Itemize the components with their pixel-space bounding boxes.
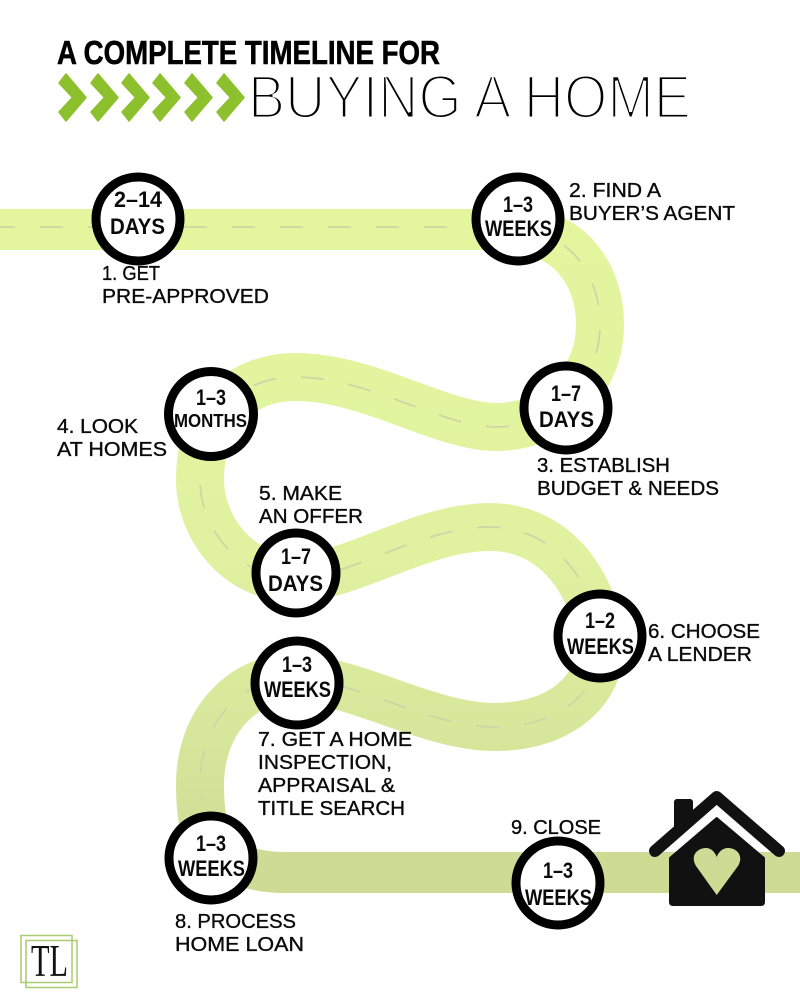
step 9 badge: WEEKS <box>525 885 592 910</box>
step 2 badge: WEEKS <box>485 216 552 241</box>
logo: TL monogram <box>21 936 77 988</box>
step 6 badge <box>558 594 642 678</box>
step 4 label: AT HOMES <box>57 439 167 461</box>
step 4 badge: 1–3 <box>196 385 226 410</box>
title: buying a home: BUYING A HOME <box>248 63 691 131</box>
title: a complete timeline for: A COMPLETE TIMELINE FOR <box>57 34 440 71</box>
step 5 badge <box>256 533 336 613</box>
winding road <box>0 227 800 872</box>
step 7 badge <box>255 641 339 725</box>
step 9 badge <box>516 841 600 925</box>
step 1 badge: 2–14 <box>114 187 163 212</box>
step 7 label: TITLE SEARCH <box>258 798 405 820</box>
step 3 badge: 1–7 <box>551 381 581 406</box>
step 6 label: A LENDER <box>648 644 752 666</box>
icon: house with heart <box>655 797 779 905</box>
step 9 badge: 1–3 <box>543 858 573 883</box>
step 4 badge <box>168 372 254 456</box>
step 5 badge: DAYS <box>268 571 323 596</box>
step 7 badge: 1–3 <box>282 652 312 677</box>
step 1 badge <box>96 177 180 261</box>
step 5 label: 5. MAKE <box>259 483 342 505</box>
step 7 badge: WEEKS <box>264 677 331 702</box>
step 4 label: 4. LOOK <box>57 416 139 438</box>
step 8 label: 8. PROCESS <box>175 911 296 933</box>
step 1 label: 1. GET <box>102 263 160 285</box>
step 6 badge: 1–2 <box>585 608 615 633</box>
step 3 badge: DAYS <box>539 407 594 432</box>
step 2 badge <box>476 177 560 261</box>
logo: TL monogram: TL <box>31 936 68 986</box>
step 8 badge <box>169 816 253 900</box>
step 8 badge: WEEKS <box>178 856 245 881</box>
step 3 label: BUDGET & NEEDS <box>537 478 719 500</box>
step 6 badge: WEEKS <box>567 634 634 659</box>
step 8 label: HOME LOAN <box>175 934 304 956</box>
step 2 label: BUYER’S AGENT <box>569 203 735 225</box>
step 9 label: 9. CLOSE <box>511 817 601 839</box>
step 4 badge: MONTHS <box>174 411 247 431</box>
icon: green chevrons <box>59 74 244 121</box>
step 3 label: 3. ESTABLISH <box>537 455 670 477</box>
step 5 label: AN OFFER <box>259 506 363 528</box>
step 3 badge <box>524 366 608 450</box>
step 5 badge: 1–7 <box>281 544 311 569</box>
step 1 label: PRE-APPROVED <box>102 286 269 308</box>
step 1 badge: DAYS <box>110 214 165 239</box>
step 7 label: INSPECTION, <box>258 752 392 774</box>
step 6 label: 6. CHOOSE <box>648 621 760 643</box>
step 7 label: 7. GET A HOME <box>258 729 412 751</box>
step 7 label: APPRAISAL & <box>258 775 396 797</box>
step 2 label: 2. FIND A <box>569 180 662 202</box>
step 8 badge: 1–3 <box>196 831 226 856</box>
step 2 badge: 1–3 <box>503 192 533 217</box>
